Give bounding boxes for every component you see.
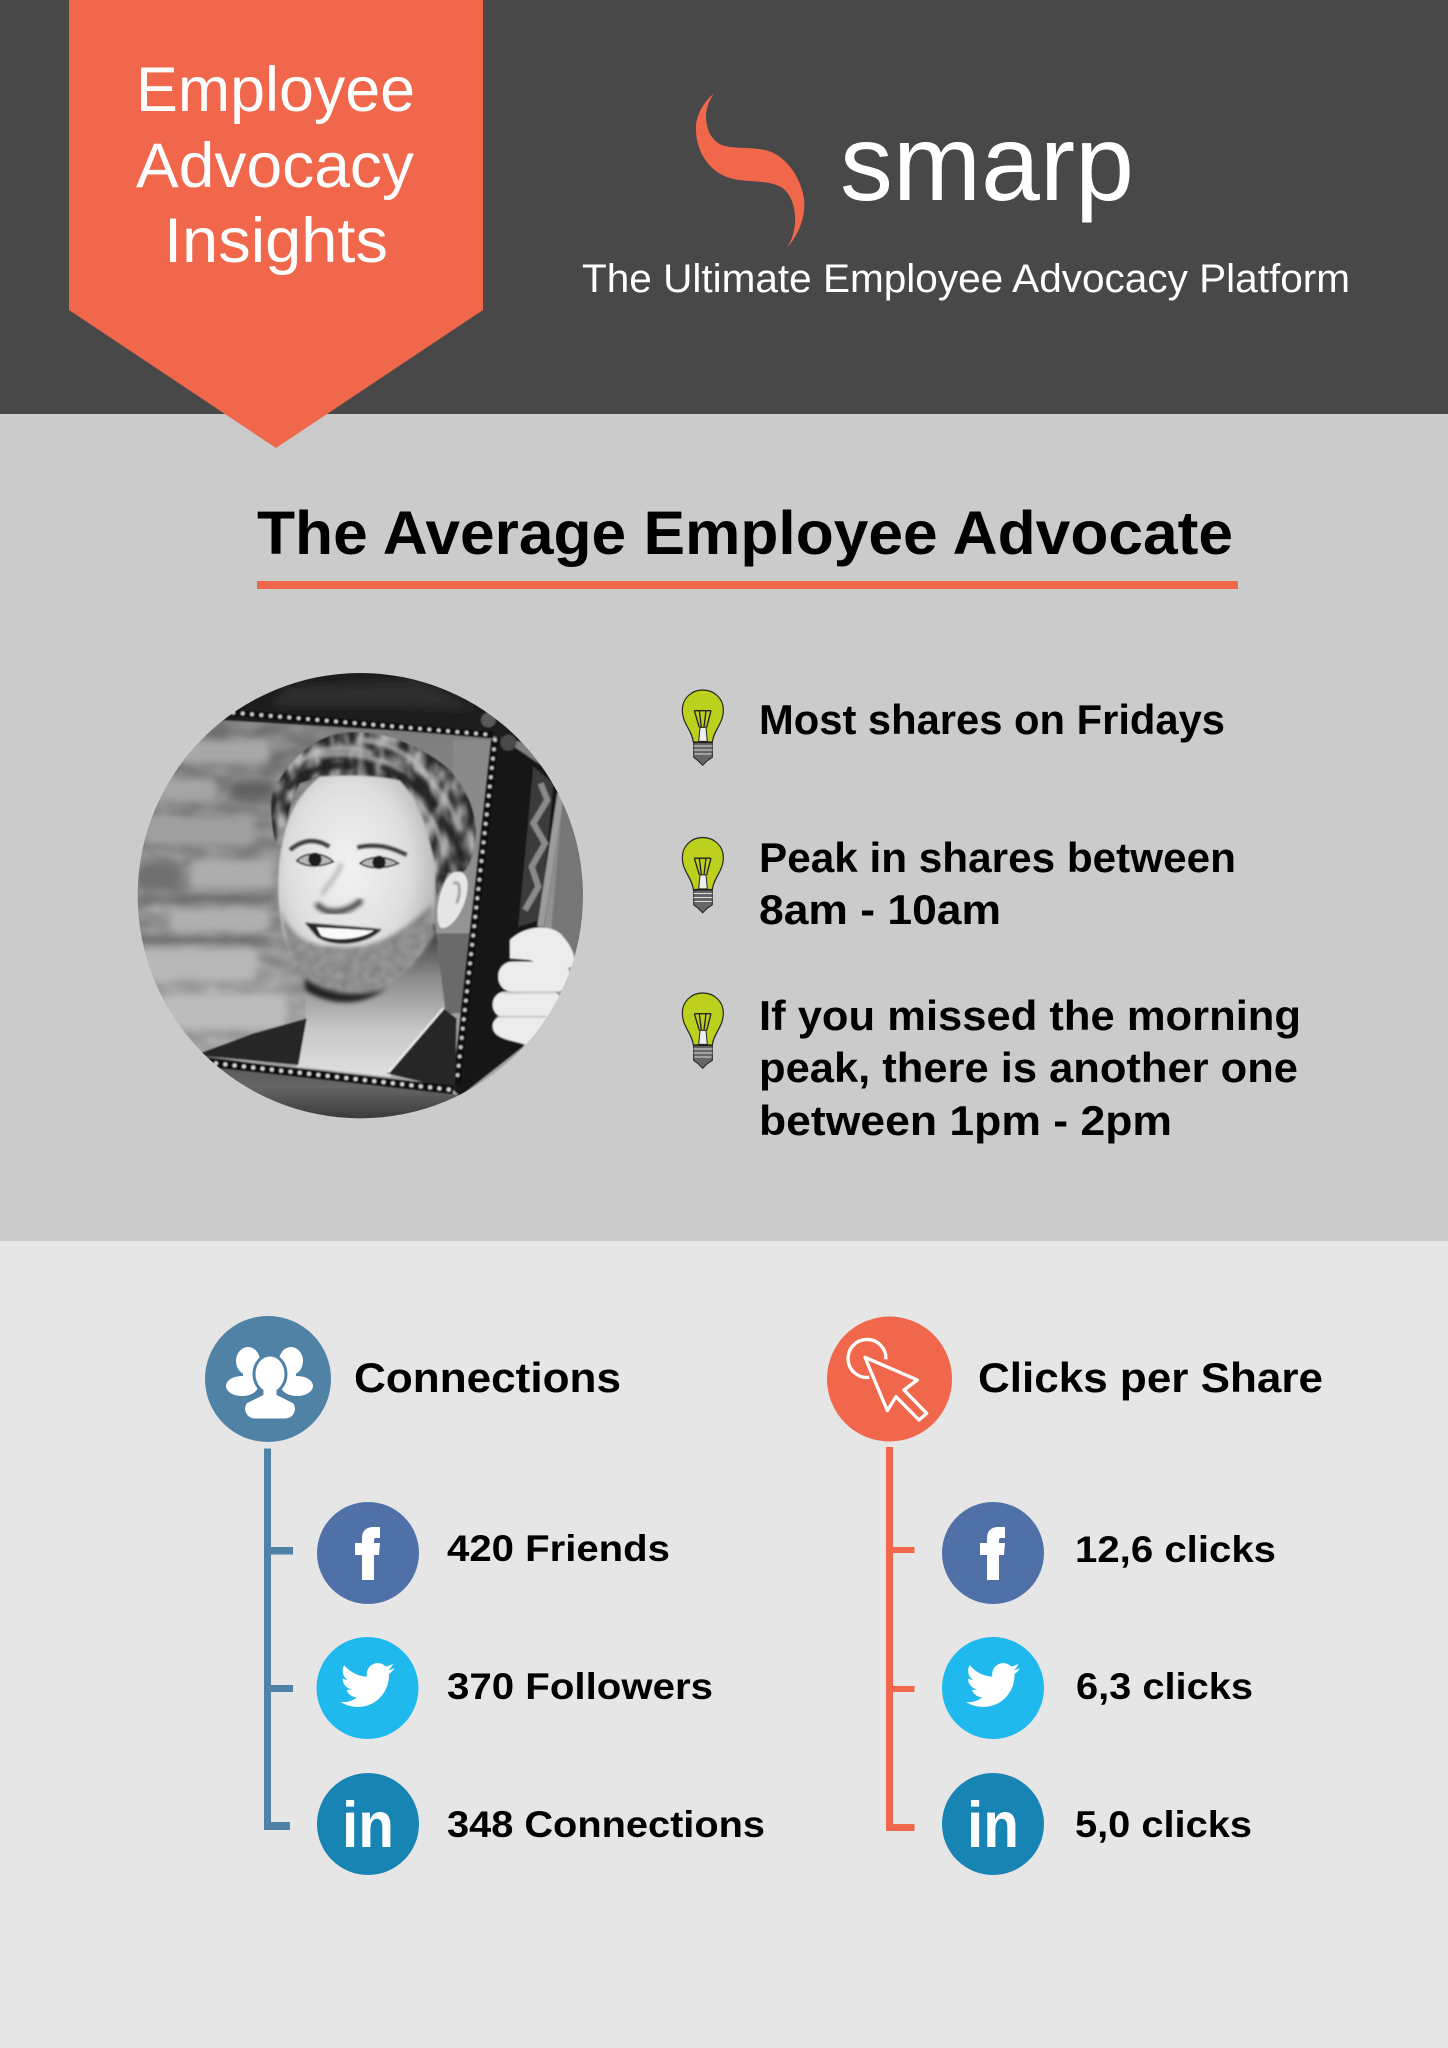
advocate section background xyxy=(0,414,1448,1241)
bullet: peak in shares: 8am - 10am xyxy=(759,886,1001,933)
row: LinkedIn connections: in xyxy=(342,1788,394,1861)
eyes xyxy=(297,854,398,868)
header band xyxy=(0,0,1448,414)
row: Twitter followers: 370 Followers xyxy=(447,1666,713,1707)
row: LinkedIn clicks: 5,0 clicks xyxy=(1075,1804,1252,1845)
beard xyxy=(280,904,436,995)
heading: Connections: Connections xyxy=(354,1354,621,1401)
bottom frame xyxy=(205,1055,460,1118)
face xyxy=(278,775,435,993)
bullet: afternoon peak: peak, there is another one xyxy=(759,1044,1298,1091)
hand xyxy=(493,928,575,1046)
row: LinkedIn clicks: in xyxy=(967,1788,1019,1861)
connector tree xyxy=(886,1447,914,1831)
connector tree xyxy=(264,1448,293,1830)
outer wall xyxy=(551,804,583,957)
heading: The Average Employee Advocate: The Average Employee Advocate xyxy=(257,499,1233,567)
bullet: afternoon peak xyxy=(682,992,1301,1144)
row: Facebook friends xyxy=(317,1502,670,1604)
heading: Clicks per Share: Clicks per Share xyxy=(978,1354,1323,1401)
row: Facebook clicks xyxy=(942,1502,1276,1604)
logo wordmark: smarp: smarp xyxy=(840,102,1134,223)
bullet: afternoon peak: between 1pm - 2pm xyxy=(759,1097,1172,1144)
frame right xyxy=(453,735,563,1097)
row: LinkedIn clicks xyxy=(942,1773,1252,1875)
banner: Employee Advocacy Insights: Employee xyxy=(136,55,415,125)
hair xyxy=(270,732,476,896)
ear xyxy=(437,871,468,928)
banner: Employee Advocacy Insights: Advocacy xyxy=(136,131,415,201)
photo: smiling man holding a picture frame xyxy=(138,673,583,1118)
tagline: The Ultimate Employee Advocacy Platform xyxy=(582,257,1350,301)
bullet: peak in shares xyxy=(682,834,1236,933)
shirt xyxy=(195,1008,457,1090)
banner: Employee Advocacy Insights: Insights xyxy=(164,206,388,276)
bullet: peak in shares: Peak in shares between xyxy=(759,834,1236,881)
logo: smarp swoosh mark xyxy=(696,93,804,247)
beads right xyxy=(457,740,495,1083)
beads top xyxy=(233,713,493,735)
banner: Employee Advocacy Insights xyxy=(69,0,483,448)
row: LinkedIn connections: 348 Connections xyxy=(447,1804,765,1845)
brows xyxy=(290,841,407,855)
neck xyxy=(297,923,445,1077)
row: Facebook clicks: 12,6 clicks xyxy=(1075,1529,1276,1570)
nose xyxy=(317,900,362,912)
frame top xyxy=(222,673,522,744)
row: Twitter clicks xyxy=(942,1637,1253,1739)
bullet: most shares on Fridays: Most shares on Fridays xyxy=(759,696,1225,743)
mouth xyxy=(305,923,382,944)
panel: connections xyxy=(205,1316,765,1875)
bullet: most shares on Fridays xyxy=(682,690,1225,765)
bullet: afternoon peak: If you missed the morning xyxy=(759,992,1301,1039)
inner right backdrop xyxy=(454,740,490,774)
panel: clicks per share xyxy=(827,1316,1323,1875)
row: Twitter clicks: 6,3 clicks xyxy=(1076,1666,1253,1707)
row: Facebook friends: 420 Friends xyxy=(447,1528,670,1569)
icon: people xyxy=(205,1316,331,1442)
icon: cursor click xyxy=(827,1316,952,1442)
row: Twitter followers xyxy=(316,1637,713,1739)
row: LinkedIn connections xyxy=(317,1773,765,1875)
